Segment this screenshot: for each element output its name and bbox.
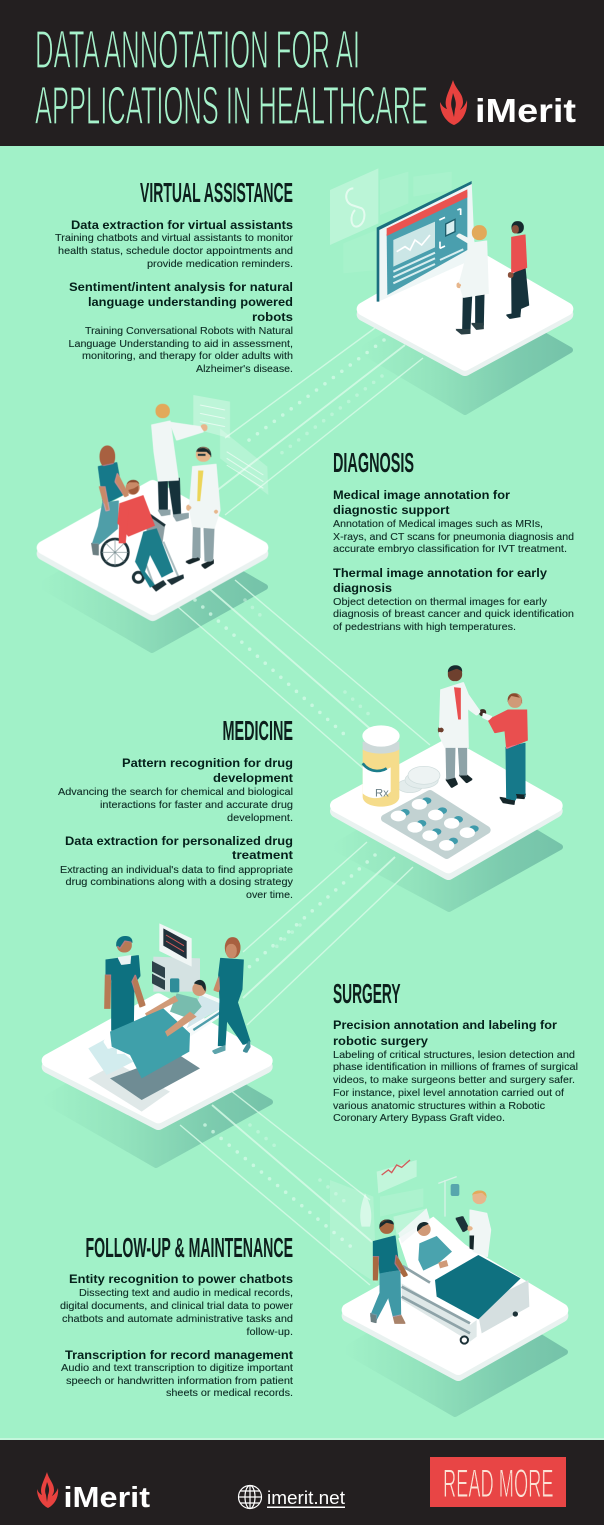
text block: precision annotation: Precision annotation and labeling for <box>333 1018 557 1032</box>
patient in bed <box>417 1222 452 1271</box>
logo: iMerit <box>440 80 576 129</box>
text block: sentiment analysis: Alzheimer's disease. <box>196 364 293 375</box>
text block: entity recognition: chatbots and automate administrative tasks and <box>62 1314 293 1325</box>
hospital bed <box>398 1208 529 1344</box>
scene: follow-up and maintenance illustration <box>330 1160 562 1374</box>
text block: entity recognition: follow-up. <box>246 1327 293 1338</box>
text block: entity recognition: Dissecting text and audio in medical records, <box>79 1288 293 1299</box>
read more button <box>430 1457 566 1507</box>
text block: personalized drug treatment: drug combinations along with a dosing strategy <box>66 877 294 888</box>
text block: sentiment analysis: Language Understanding to aid in assessment, <box>68 339 293 350</box>
text block: thermal image annotation: diagnosis <box>333 581 392 595</box>
doctor seen from behind <box>456 226 488 334</box>
connector lines: medicine to surgery <box>243 842 413 1025</box>
text block: data extraction: provide medication reminders. <box>147 259 293 270</box>
website link with globe icon <box>238 1486 345 1508</box>
patient in wheelchair <box>102 480 184 592</box>
light foot plate <box>88 1038 133 1075</box>
text block: medical image annotation: Annotation of Medical images such as MRIs, <box>333 519 543 530</box>
doctor with clipboard <box>456 1191 491 1257</box>
logo: iMerit footer: iMerit <box>64 1482 150 1514</box>
platform <box>363 250 567 369</box>
platform <box>48 1000 266 1123</box>
connector lines: virtual assistance to diagnosis <box>215 328 423 515</box>
panel: diagnosis <box>333 447 574 633</box>
panel: virtual assistance <box>55 177 294 375</box>
text block: precision annotation <box>333 1018 578 1124</box>
text block: personalized drug treatment: treatment <box>232 848 293 862</box>
scene: virtual assistance illustration <box>330 168 567 369</box>
text block: sentiment analysis <box>68 280 293 375</box>
text block: medical image annotation <box>333 488 574 555</box>
text block: thermal image annotation <box>333 566 574 633</box>
heading: medicine: MEDICINE <box>222 715 293 746</box>
text block: sentiment analysis: Training Conversational Robots with Natural <box>85 326 293 337</box>
panel: surgery: SURGERY <box>333 978 401 1009</box>
connector lines: surgery to follow-up <box>180 1090 372 1285</box>
text block: data extraction <box>55 218 294 270</box>
text block: pattern recognition <box>58 756 293 824</box>
text block: medical image annotation: Medical image annotation for <box>333 488 510 502</box>
holographic glass panels <box>330 1160 428 1283</box>
title <box>35 20 428 136</box>
website link with globe icon: imerit.net <box>267 1488 345 1508</box>
platform <box>43 487 262 614</box>
panel: follow-up and maintenance <box>60 1232 294 1399</box>
text block: precision annotation: various anatomic structures within a Robotic <box>333 1101 545 1112</box>
header band <box>0 0 604 146</box>
text block: sentiment analysis: language understanding powered <box>88 295 293 309</box>
text block: precision annotation: For instance, pixel level annotation carried out of <box>333 1088 564 1099</box>
text block: entity recognition: Entity recognition to power chatbots <box>69 1272 293 1286</box>
blister pack <box>385 794 487 855</box>
text block: personalized drug treatment: Data extraction for personalized drug <box>65 834 293 848</box>
doctor handing medication <box>438 666 486 787</box>
doctor with stethoscope <box>186 447 220 568</box>
text block: sentiment analysis: robots <box>252 310 293 324</box>
text block: transcription: speech or handwritten information from patient <box>66 1376 293 1387</box>
scene: medicine illustration <box>337 666 556 873</box>
footer band <box>0 1438 604 1525</box>
display board <box>377 181 475 302</box>
text block: thermal image annotation: Thermal image annotation for early <box>333 566 547 580</box>
text block: sentiment analysis: monitoring, and therapy for older adults with <box>82 351 293 362</box>
text block: data extraction: Training chatbots and virtual assistants to monitor <box>55 233 294 244</box>
scene: surgery illustration <box>48 923 266 1123</box>
woman pushing wheelchair <box>92 446 128 555</box>
text block: precision annotation: Coronary Artery Bypass Graft video. <box>333 1113 505 1124</box>
patient monitor and cart <box>152 923 200 992</box>
patient under drape <box>110 980 206 1078</box>
text block: data extraction: health status, schedule doctor appointments and <box>58 246 293 257</box>
customer in red sweater <box>483 694 527 804</box>
logo: iMerit: iMerit <box>475 92 576 129</box>
text block: pattern recognition: interactions for faster and accurate drug <box>100 800 293 811</box>
text block: transcription: Transcription for record management <box>65 1348 293 1362</box>
text block: precision annotation: robotic surgery <box>333 1034 428 1048</box>
text block: transcription: sheets or medical records. <box>166 1388 293 1399</box>
text block: pattern recognition: Advancing the search for chemical and biological <box>58 787 293 798</box>
heading: follow-up and maintenance: FOLLOW-UP & MAINTENANCE <box>86 1232 293 1263</box>
text block: medical image annotation: X-rays, and CT scans for pneumonia diagnosis and <box>333 532 574 543</box>
text block: precision annotation: Labeling of critical structures, lesion detection and <box>333 1050 575 1061</box>
text block: medical image annotation: diagnostic support <box>333 503 450 517</box>
text block: transcription <box>61 1348 293 1399</box>
text block: transcription: Audio and text transcription to digitize important <box>61 1363 293 1374</box>
text block: pattern recognition: development <box>213 771 293 785</box>
IV stand <box>438 1177 459 1217</box>
pill bottle <box>362 725 400 807</box>
connector lines: diagnosis to medicine <box>170 580 430 770</box>
heading: diagnosis: DIAGNOSIS <box>333 447 414 478</box>
logo: iMerit footer <box>37 1472 150 1514</box>
scene: diagnosis illustration <box>43 395 268 614</box>
text block: thermal image annotation: Object detection on thermal images for early <box>333 597 548 608</box>
nurse walking <box>371 1220 407 1323</box>
left surgeon in scrubs <box>104 937 145 1053</box>
text block: precision annotation: phase identification in millions of frames of surgical <box>333 1062 578 1073</box>
text block: data extraction: Data extraction for virtual assistants <box>71 218 293 232</box>
pill bottle: Rx <box>375 788 389 800</box>
text block: precision annotation: videos, to make surgeons better and surgery safer. <box>333 1075 575 1086</box>
stacked tablets <box>397 766 440 793</box>
text block: entity recognition <box>60 1272 294 1338</box>
panel: medicine <box>58 715 294 901</box>
platform <box>337 745 556 873</box>
man in red sweater <box>507 222 529 318</box>
operating table head <box>187 990 237 1037</box>
holographic glass panels <box>193 395 268 495</box>
text block: medical image annotation: accurate embryo classification for IVT treatment. <box>333 544 567 555</box>
text block: pattern recognition: Pattern recognition for drug <box>122 756 293 770</box>
text block: thermal image annotation: of pedestrians with high temperatures. <box>333 622 516 633</box>
heading: virtual assistance: VIRTUAL ASSISTANCE <box>140 177 293 208</box>
holographic glass panels <box>330 168 452 273</box>
text block: personalized drug treatment: Extracting an individual's data to find appropriate <box>60 865 293 876</box>
doctor pointing at panel <box>152 404 207 521</box>
text block: pattern recognition: development. <box>227 813 293 824</box>
text block: personalized drug treatment: over time. <box>246 890 293 901</box>
text block: thermal image annotation: diagnosis of breast cancer and quick identification <box>333 609 574 620</box>
right nurse <box>213 938 250 1054</box>
text block: sentiment analysis: Sentiment/intent analysis for natural <box>69 280 293 294</box>
panel: surgery <box>333 978 578 1124</box>
platform shadows <box>40 290 570 1414</box>
table base <box>110 1053 200 1100</box>
platform <box>348 1248 562 1374</box>
text block: entity recognition: digital documents, and clinical trial data to power <box>60 1301 294 1312</box>
text block: personalized drug treatment <box>60 834 294 901</box>
